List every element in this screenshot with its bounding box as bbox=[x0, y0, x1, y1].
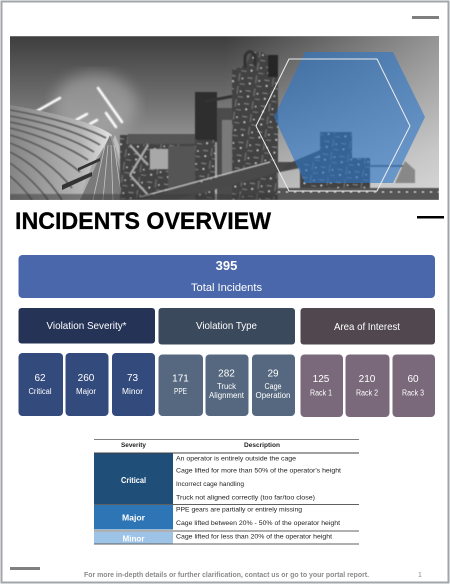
severity table: Cage lifted for less than 20% of the operator height bbox=[176, 534, 332, 540]
stat: rack 3: 60 bbox=[407, 374, 419, 385]
severity table: Incorrect cage handling bbox=[176, 481, 244, 488]
stat: minor: 73 bbox=[127, 373, 138, 384]
stat: rack 1 bbox=[300, 354, 343, 417]
title accent dash bbox=[417, 216, 444, 218]
panel: total incidents bbox=[18, 255, 435, 298]
stat: rack 3: Rack 3 bbox=[402, 388, 424, 398]
top right accent bar bbox=[412, 16, 439, 19]
stat: major: Major bbox=[76, 387, 96, 396]
stat: rack 2: 210 bbox=[359, 374, 376, 385]
stat: cage operation: Operation bbox=[256, 391, 290, 400]
severity table bbox=[94, 440, 359, 544]
blue hexagon overlay bbox=[274, 52, 425, 183]
footer note: For more in-depth details or further clarification, contact us or go to your portal report. bbox=[84, 572, 369, 579]
stat: rack 1: Rack 1 bbox=[310, 388, 332, 398]
stat: major bbox=[66, 353, 108, 416]
severity table: An operator is entirely outside the cage bbox=[176, 456, 296, 462]
bottom left accent bar bbox=[10, 567, 40, 570]
severity table: Minor bbox=[122, 534, 144, 544]
severity table: Cage lifted for more than 50% of the operator's height bbox=[176, 468, 341, 474]
stat: major: 260 bbox=[78, 373, 95, 384]
stat: critical bbox=[18, 353, 63, 416]
hero photo: industrial plant bbox=[10, 36, 439, 200]
title: INCIDENTS OVERVIEW bbox=[15, 208, 271, 235]
panel: total incidents: 395 bbox=[216, 258, 237, 273]
page number: 1 bbox=[418, 572, 422, 579]
severity table: Major bbox=[122, 514, 145, 522]
white hexagon outline bbox=[256, 59, 410, 191]
panel: area of interest header: Area of Interest bbox=[334, 321, 400, 333]
panel: total incidents: Total Incidents bbox=[191, 282, 262, 294]
panel: violation type header bbox=[158, 308, 295, 344]
stat: ppe: 171 bbox=[172, 374, 189, 384]
severity table: PPE gears are partially or entirely missing bbox=[176, 506, 302, 514]
severity table: Cage lifted between 20% - 50% of the operator height bbox=[176, 520, 340, 527]
stat: rack 1: 125 bbox=[313, 374, 330, 385]
stat: rack 2: Rack 2 bbox=[356, 388, 378, 398]
panel: violation severity header bbox=[18, 308, 155, 344]
severity table: Critical bbox=[121, 476, 146, 485]
panel: violation severity header: Violation Severity* bbox=[46, 320, 126, 332]
stat: truck alignment: Truck bbox=[217, 382, 237, 391]
severity table: Severity bbox=[121, 442, 146, 449]
severity table: Truck not aligned correctly (too far/too close) bbox=[176, 494, 315, 502]
stat: cage operation bbox=[252, 354, 295, 416]
panel: area of interest header bbox=[300, 308, 435, 344]
stat: critical: 62 bbox=[34, 373, 46, 384]
stat: truck alignment: 282 bbox=[218, 368, 235, 380]
stat: cage operation: 29 bbox=[267, 368, 279, 380]
stat: minor bbox=[112, 353, 155, 416]
stat: truck alignment: Alignment bbox=[209, 391, 245, 400]
stat: rack 2 bbox=[346, 354, 390, 417]
panel: violation type header: Violation Type bbox=[196, 320, 257, 332]
stat: minor: Minor bbox=[122, 387, 143, 396]
stat: critical: Critical bbox=[28, 387, 52, 396]
stat: ppe bbox=[158, 354, 203, 416]
stat: cage operation: Cage bbox=[264, 382, 282, 391]
severity table: Description bbox=[244, 442, 280, 449]
stat: ppe: PPE bbox=[174, 387, 187, 396]
stat: rack 3 bbox=[392, 354, 435, 417]
stat: truck alignment bbox=[206, 354, 248, 416]
